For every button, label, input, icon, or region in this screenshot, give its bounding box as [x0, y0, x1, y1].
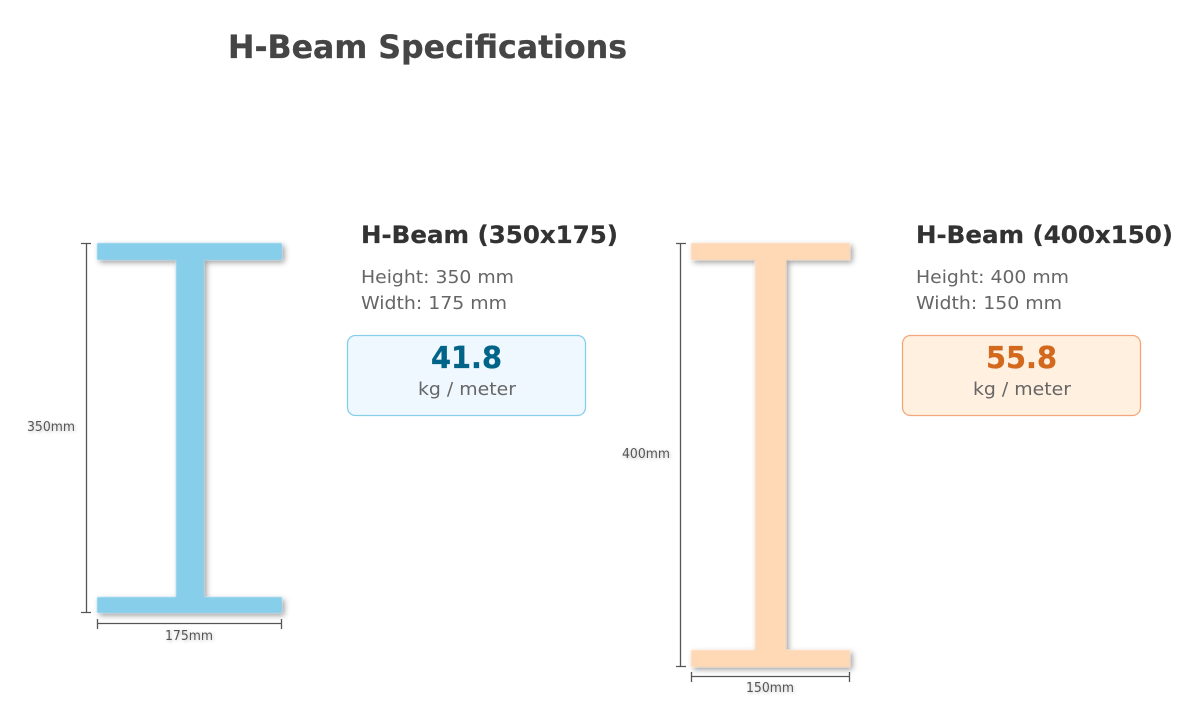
width dimension: 175mm: [97, 619, 282, 644]
beam drawing: 350x175: [98, 244, 281, 612]
panel: H-Beam 400x150: [622, 221, 1173, 696]
width dimension: 175mm: 175mm: [165, 629, 213, 644]
heading: H-Beam 400x150: H-Beam (400x150): [916, 221, 1173, 249]
width dimension: 150mm: [691, 672, 850, 696]
specs text: Height: 350 mm: [361, 267, 514, 288]
callout: weight 55.8: 55.8: [986, 341, 1057, 376]
callout: weight 55.8: kg / meter: [973, 379, 1072, 400]
height dimension: 400mm: [622, 243, 686, 667]
heading: H-Beam 350x175: H-Beam (350x175): [361, 221, 618, 249]
height dimension: 350mm: [27, 243, 91, 613]
specs text: Width: 175 mm: [361, 293, 507, 314]
callout: weight 55.8: [902, 336, 1140, 416]
callout: weight 41.8: 41.8: [431, 341, 502, 376]
title: H-Beam Specifications: [228, 28, 627, 66]
height dimension: 350mm: 350mm: [27, 420, 75, 435]
specs text: Height: 400 mm: [916, 267, 1069, 288]
panel: H-Beam 350x175: [27, 221, 618, 644]
specs text: [361, 267, 514, 314]
height dimension: 400mm: 400mm: [622, 447, 670, 462]
specs text: [916, 267, 1069, 314]
specs text: Width: 150 mm: [916, 293, 1062, 314]
callout: weight 41.8: kg / meter: [418, 379, 517, 400]
callout: weight 41.8: [348, 336, 586, 416]
width dimension: 150mm: 150mm: [746, 681, 794, 696]
beam drawing: 400x150: [692, 244, 849, 666]
